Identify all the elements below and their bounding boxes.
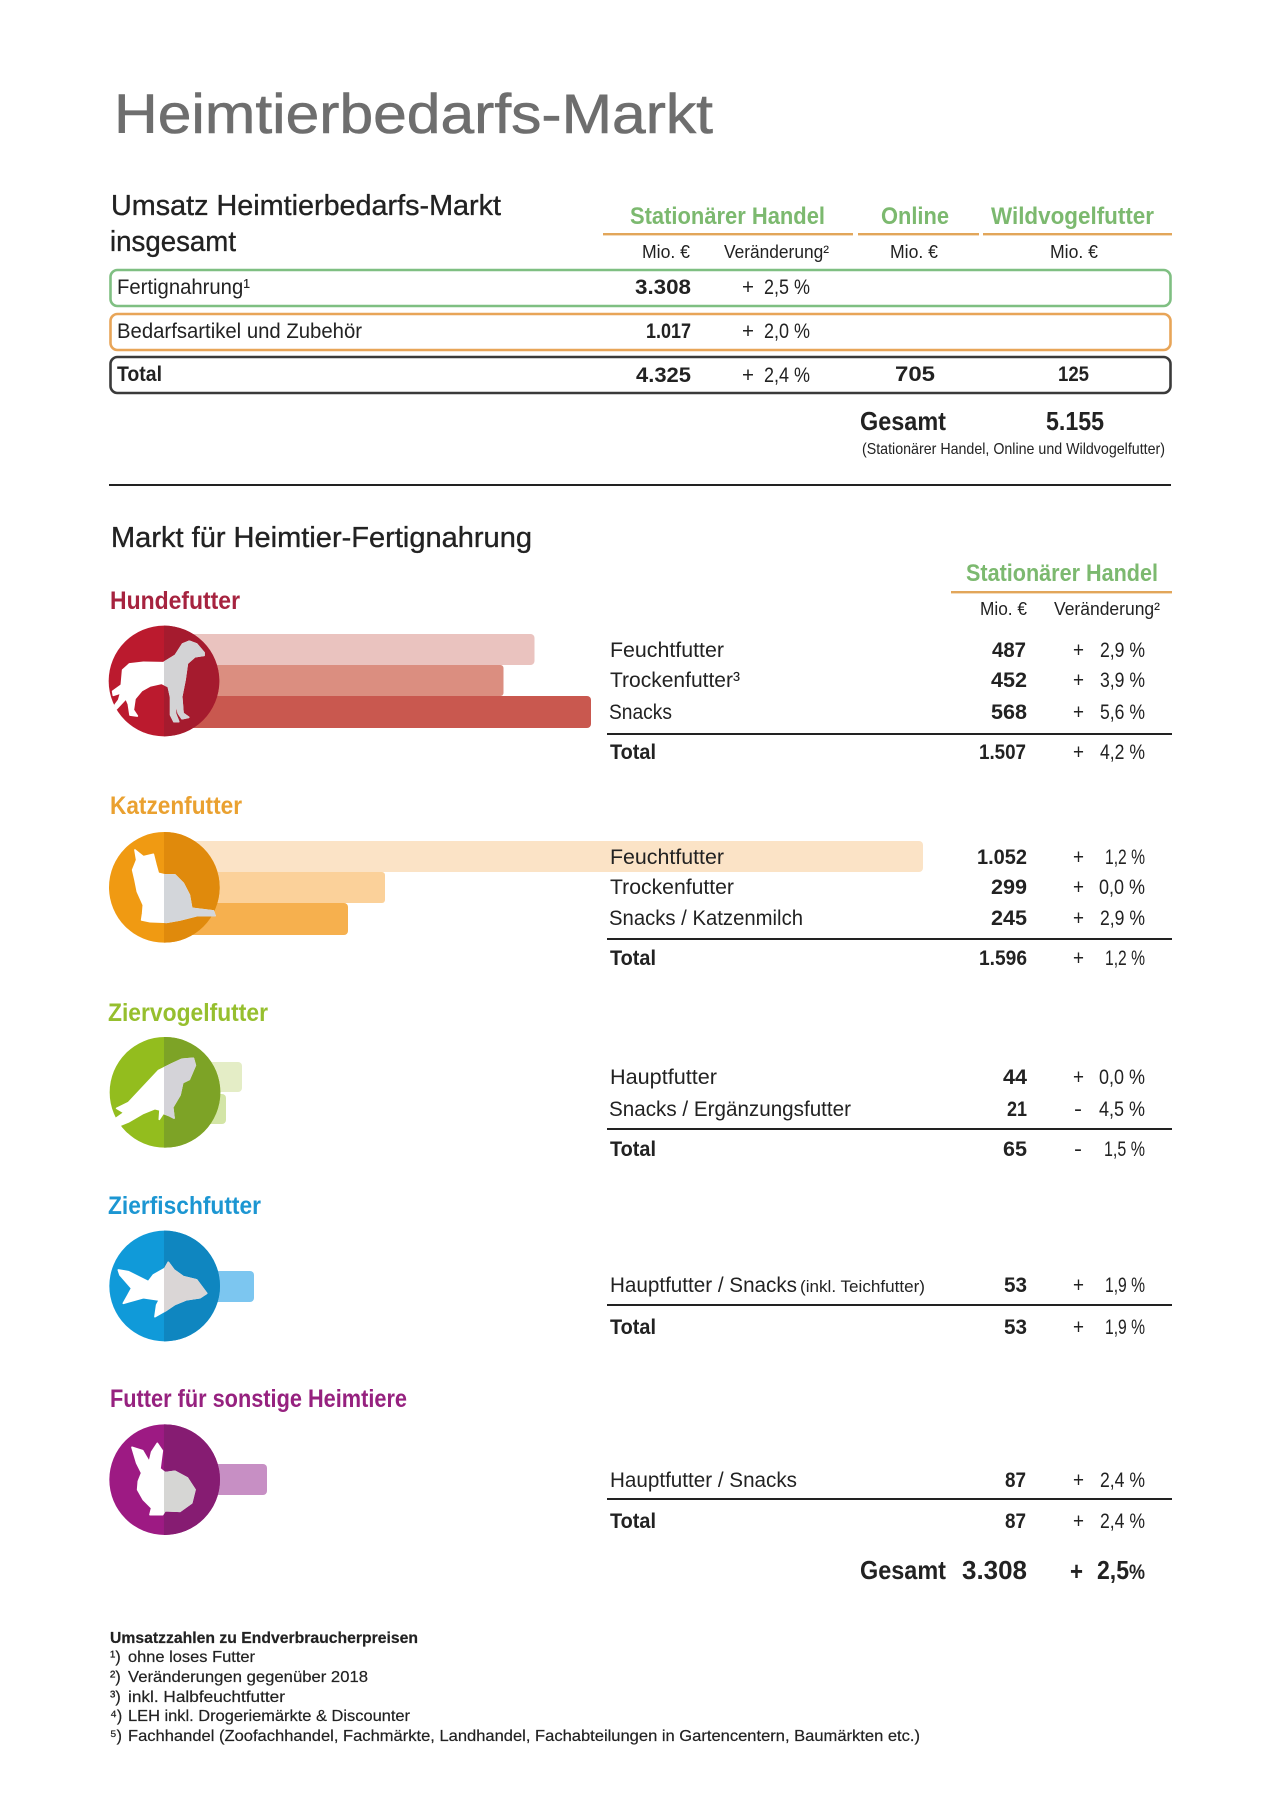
row: Total Zierfischfutter: + bbox=[1073, 1315, 1084, 1339]
heading: Markt für Heimtier-Fertignahrung: Markt für Heimtier-Fertignahrung bbox=[111, 522, 532, 554]
row: Trockenfutter: 3,9 % bbox=[1100, 668, 1145, 692]
row: Snacks: + bbox=[1073, 700, 1084, 724]
row: Snacks: Snacks bbox=[609, 700, 672, 724]
icon: dog bbox=[109, 626, 219, 736]
footnotes: ¹) bbox=[110, 1649, 121, 1666]
row: Fertignahrung bbox=[110, 270, 1170, 306]
row: Snacks / Ergänzungsfutter bbox=[609, 1097, 1145, 1121]
row: Snacks / Katzenmilch: 2,9 % bbox=[1100, 906, 1145, 930]
footnotes: Umsatzzahlen zu Endverbraucherpreisen bbox=[110, 1630, 418, 1647]
row: Total sonstige Heimtiere: 2,4 % bbox=[1100, 1509, 1145, 1533]
icon: bird bbox=[110, 1037, 220, 1148]
row: Trockenfutter: Trockenfutter³ bbox=[610, 668, 740, 692]
row: Total Katzenfutter: + bbox=[1073, 946, 1084, 970]
column header: Stationärer Handel: Veränderung² bbox=[724, 242, 829, 262]
row: Snacks: 568 bbox=[991, 700, 1027, 724]
row: Hauptfutter / Snacks bbox=[610, 1273, 1145, 1297]
row: Total Hundefutter: Total bbox=[610, 740, 656, 764]
row: Hauptfutter / Snacks bbox=[610, 1468, 1145, 1492]
row: Trockenfutter: Trockenfutter bbox=[610, 875, 734, 899]
column header: Wildvogelfutter bbox=[983, 203, 1172, 262]
heading: Ziervogelfutter: Ziervogelfutter bbox=[108, 999, 268, 1027]
row: Trockenfutter: 0,0 % bbox=[1099, 875, 1145, 899]
row: Fertignahrung: 2,5 % bbox=[764, 275, 810, 299]
row: Total: + bbox=[742, 363, 754, 387]
footnotes: Veränderungen gegenüber 2018 bbox=[128, 1669, 368, 1686]
row: Feuchtfutter: + bbox=[1073, 638, 1084, 662]
row: Bedarfsartikel und Zubehör bbox=[110, 314, 1170, 350]
title: Heimtierbedarfs-Markt bbox=[114, 82, 713, 145]
icon: rabbit bbox=[109, 1424, 220, 1535]
total: Gesamt 3.308: Gesamt bbox=[860, 1555, 946, 1585]
row: Total bbox=[110, 357, 1170, 393]
heading: Umsatz: insgesamt bbox=[110, 226, 236, 258]
total: Gesamt 3.308 bbox=[860, 1555, 1145, 1586]
row: Bedarfsartikel und Zubehör: Bedarfsartikel und Zubehör bbox=[117, 319, 362, 343]
section: Katzenfutter bbox=[109, 792, 1172, 970]
row: Feuchtfutter: Feuchtfutter bbox=[610, 638, 724, 662]
row: Trockenfutter: 299 bbox=[991, 875, 1027, 899]
row: Total Katzenfutter: Total bbox=[610, 946, 656, 970]
icon: fish bbox=[109, 1231, 220, 1341]
heading: Zierfischfutter: Zierfischfutter bbox=[108, 1192, 261, 1220]
section: Zierfischfutter bbox=[108, 1192, 1172, 1341]
bar chart: Katzenfutter bbox=[170, 841, 923, 935]
row: Hauptfutter / Snacks: Hauptfutter / Snacks bbox=[610, 1273, 797, 1297]
section: Ziervogelfutter bbox=[108, 999, 1172, 1161]
footnotes: ³) bbox=[110, 1689, 121, 1706]
row: Snacks / Ergänzungsfutter: 4,5 % bbox=[1099, 1097, 1145, 1121]
bar chart: Zierfischfutter bbox=[170, 1271, 254, 1302]
row: Total Katzenfutter: 1,2 % bbox=[1105, 946, 1145, 970]
row: Snacks / Katzenmilch: 245 bbox=[991, 906, 1027, 930]
bar chart: Ziervogelfutter bbox=[170, 1062, 242, 1124]
row: Total sonstige Heimtiere: 87 bbox=[1005, 1509, 1026, 1533]
row: Trockenfutter: 452 bbox=[991, 668, 1027, 692]
row: Hauptfutter: 0,0 % bbox=[1099, 1065, 1145, 1089]
footnotes: ⁴) bbox=[110, 1708, 122, 1725]
row: Hauptfutter: 44 bbox=[1003, 1065, 1027, 1089]
row: Hauptfutter / Snacks: + bbox=[1073, 1468, 1084, 1492]
column header: Online: Online bbox=[881, 203, 949, 230]
row: Total sonstige Heimtiere: + bbox=[1073, 1509, 1084, 1533]
row: Snacks / Ergänzungsfutter: - bbox=[1074, 1097, 1082, 1121]
panel: Umsatz Heimtierbedarfs-Markt insgesamt bbox=[110, 190, 1172, 458]
heading: Umsatz: Umsatz Heimtierbedarfs-Markt bbox=[111, 190, 501, 222]
row: Feuchtfutter: + bbox=[1073, 845, 1084, 869]
row: Total Ziervogelfutter: 65 bbox=[1003, 1137, 1027, 1161]
row: Fertignahrung: 3.308 bbox=[635, 275, 691, 299]
row: Trockenfutter: + bbox=[1073, 875, 1084, 899]
row: Hauptfutter / Snacks: Hauptfutter / Snacks bbox=[610, 1468, 797, 1492]
total: Gesamt 5.155 bbox=[860, 406, 1165, 458]
footnotes: ⁵) bbox=[110, 1728, 122, 1745]
column header: Wildvogelfutter: Wildvogelfutter bbox=[991, 203, 1154, 230]
column header: Stationärer Handel: Stationärer Handel bbox=[630, 203, 825, 230]
row: Fertignahrung: + bbox=[742, 275, 754, 299]
row: Feuchtfutter: 2,9 % bbox=[1100, 638, 1145, 662]
heading: Katzenfutter: Katzenfutter bbox=[110, 792, 242, 820]
bar chart: Hundefutter bbox=[170, 634, 591, 728]
row: Total: 125 bbox=[1058, 362, 1089, 386]
row: Total: 2,4 % bbox=[764, 363, 810, 387]
row: Total Hundefutter: 4,2 % bbox=[1100, 740, 1145, 764]
column header: Stationärer Handel (Fertignahrung): Veränderung² bbox=[1054, 599, 1160, 619]
column header: Online bbox=[858, 203, 979, 262]
row: Total Hundefutter bbox=[610, 740, 1145, 764]
row: Total: 705 bbox=[895, 362, 935, 386]
row: Snacks / Katzenmilch: + bbox=[1073, 906, 1084, 930]
row: Snacks / Katzenmilch: Snacks / Katzenmilch bbox=[609, 906, 803, 930]
row: Total: Total bbox=[117, 362, 162, 386]
row: Total Ziervogelfutter: - bbox=[1074, 1137, 1082, 1161]
column header: Stationärer Handel: Mio. € bbox=[642, 242, 690, 262]
row: Snacks: 5,6 % bbox=[1100, 700, 1145, 724]
total: Gesamt 3.308: 2,5 bbox=[1097, 1555, 1129, 1585]
row: Trockenfutter bbox=[610, 668, 1145, 692]
column header: Stationärer Handel (Fertignahrung): Mio. € bbox=[980, 599, 1027, 619]
heading: Futter für sonstige Heimtiere: Futter für sonstige Heimtiere bbox=[110, 1385, 407, 1413]
heading: Hundefutter: Hundefutter bbox=[110, 587, 240, 615]
row: Total: 4.325 bbox=[636, 363, 691, 387]
total: Gesamt 3.308: + bbox=[1070, 1556, 1083, 1586]
heading: Umsatz bbox=[110, 190, 501, 258]
row: Total Ziervogelfutter: Total bbox=[610, 1137, 656, 1161]
row: Bedarfsartikel und Zubehör: 2,0 % bbox=[764, 319, 810, 343]
section: Futter für sonstige Heimtiere bbox=[109, 1385, 1172, 1535]
row: Total Zierfischfutter bbox=[610, 1315, 1145, 1339]
row: Total sonstige Heimtiere: Total bbox=[610, 1509, 656, 1533]
row: Total Hundefutter: + bbox=[1073, 740, 1084, 764]
footnotes: ²) bbox=[110, 1669, 121, 1686]
bar chart: sonstige Heimtiere bbox=[170, 1464, 267, 1495]
row: Snacks / Katzenmilch bbox=[609, 906, 1145, 930]
row: Hauptfutter bbox=[610, 1065, 1145, 1089]
row: Hauptfutter / Snacks: + bbox=[1073, 1273, 1084, 1297]
row: Total Ziervogelfutter bbox=[610, 1137, 1145, 1161]
row: Total Ziervogelfutter: 1,5 % bbox=[1104, 1137, 1145, 1161]
row: Hauptfutter / Snacks: (inkl. Teichfutter) bbox=[800, 1277, 925, 1296]
row: Feuchtfutter bbox=[610, 638, 1145, 662]
row: Total Katzenfutter: 1.596 bbox=[979, 946, 1027, 970]
total: Gesamt 5.155: Gesamt bbox=[860, 406, 946, 436]
total: Gesamt 5.155: (Stationärer Handel, Online und Wildvogelfutter) bbox=[862, 441, 1165, 458]
row: Hauptfutter / Snacks: 53 bbox=[1004, 1273, 1027, 1297]
row: Total Zierfischfutter: 53 bbox=[1004, 1315, 1027, 1339]
footnotes: Fachhandel (Zoofachhandel, Fachmärkte, Landhandel, Fachabteilungen in Gartencentern, Baumärkten etc.) bbox=[128, 1728, 920, 1745]
footnotes: LEH inkl. Drogeriemärkte & Discounter bbox=[128, 1708, 411, 1725]
row: Hauptfutter: + bbox=[1073, 1065, 1084, 1089]
column header: Stationärer Handel bbox=[603, 203, 853, 262]
row: Bedarfsartikel und Zubehör: 1.017 bbox=[646, 319, 691, 343]
row: Bedarfsartikel und Zubehör: + bbox=[742, 319, 754, 343]
total: Gesamt 5.155: 5.155 bbox=[1046, 406, 1104, 436]
row: Total Zierfischfutter: 1,9 % bbox=[1105, 1315, 1145, 1339]
row: Snacks / Ergänzungsfutter: 21 bbox=[1007, 1097, 1027, 1121]
row: Total Hundefutter: 1.507 bbox=[979, 740, 1026, 764]
row: Total Zierfischfutter: Total bbox=[610, 1315, 656, 1339]
column header: Wildvogelfutter: Mio. € bbox=[1050, 242, 1098, 262]
section: Hundefutter bbox=[109, 587, 1172, 764]
row: Hauptfutter / Snacks: 2,4 % bbox=[1100, 1468, 1145, 1492]
column header: Stationärer Handel (Fertignahrung) bbox=[951, 560, 1172, 619]
row: Feuchtfutter: Feuchtfutter bbox=[610, 845, 724, 869]
footnotes bbox=[110, 1630, 920, 1745]
row: Total Katzenfutter bbox=[610, 946, 1145, 970]
row: Fertignahrung: Fertignahrung¹ bbox=[117, 275, 250, 299]
row: Snacks bbox=[609, 700, 1145, 724]
row: Trockenfutter: + bbox=[1073, 668, 1084, 692]
row: Trockenfutter bbox=[610, 875, 1145, 899]
icon: cat bbox=[109, 832, 220, 943]
row: Feuchtfutter: 1.052 bbox=[977, 845, 1027, 869]
footnotes: ohne loses Futter bbox=[128, 1649, 256, 1666]
row: Total sonstige Heimtiere bbox=[610, 1509, 1145, 1533]
row: Feuchtfutter: 1,2 % bbox=[1105, 845, 1145, 869]
footnotes: inkl. Halbfeuchtfutter bbox=[128, 1689, 286, 1706]
row: Hauptfutter: Hauptfutter bbox=[610, 1065, 717, 1089]
row: Feuchtfutter bbox=[610, 845, 1145, 869]
row: Hauptfutter / Snacks: 1,9 % bbox=[1105, 1273, 1145, 1297]
total: Gesamt 3.308: % bbox=[1129, 1560, 1145, 1584]
column header: Online: Mio. € bbox=[890, 242, 938, 262]
row: Snacks / Ergänzungsfutter: Snacks / Ergänzungsfutter bbox=[609, 1097, 851, 1121]
column header: Stationärer Handel (Fertignahrung): Stationärer Handel bbox=[966, 560, 1158, 587]
row: Feuchtfutter: 487 bbox=[992, 638, 1026, 662]
total: Gesamt 3.308: 3.308 bbox=[962, 1555, 1027, 1585]
row: Hauptfutter / Snacks: 87 bbox=[1005, 1468, 1026, 1492]
